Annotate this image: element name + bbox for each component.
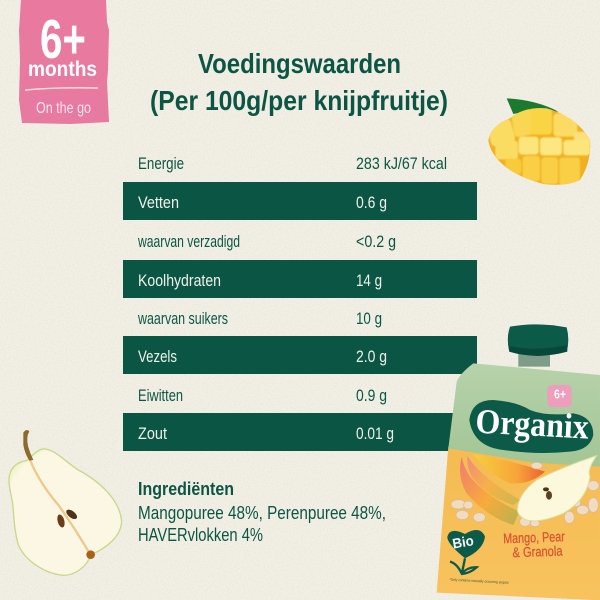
pouch badge: 6+ (547, 385, 572, 407)
ingredients: Mangopuree 48%, Perenpuree 48%, (138, 503, 386, 523)
row: Vezels (123, 336, 477, 374)
row: Eiwitten (138, 386, 387, 405)
badge: 6+ months on the go (19, 0, 109, 124)
ingredients: Ingrediënten (138, 479, 234, 499)
bio logo (447, 530, 485, 574)
pouch footnote: *Only contains naturally occurring sugars (449, 578, 509, 585)
icon: pear half (9, 430, 122, 575)
row: waarvan verzadigd: <0.2 g (356, 232, 396, 251)
row: Eiwitten: Eiwitten (138, 386, 183, 405)
logo: Organix: Organix (475, 402, 590, 447)
row: waarvan suikers (137, 309, 382, 328)
product name: Mango, Pear (503, 528, 565, 546)
product name (503, 528, 565, 560)
row: Eiwitten: 0.9 g (356, 386, 387, 405)
row: waarvan verzadigd (137, 232, 396, 251)
row: Vezels: 2.0 g (356, 347, 387, 366)
pouch pear (517, 456, 597, 521)
row: Vetten: 0.6 g (356, 193, 387, 212)
row: Koolhydraten: Koolhydraten (138, 271, 221, 290)
row: Energie: Energie (138, 154, 184, 173)
pouch body: yellow (437, 447, 600, 600)
row: Zout (123, 413, 477, 451)
ingredients: HAVERvlokken 4% (138, 525, 263, 545)
row: Zout: Zout (138, 424, 167, 443)
row: Zout: 0.01 g (356, 424, 394, 443)
pouch badge: 6+: 6+ (554, 387, 566, 401)
row: Vetten: Vetten (138, 193, 179, 212)
product pouch (437, 324, 600, 600)
title (150, 48, 448, 116)
row: Vezels: Vezels (138, 347, 177, 366)
row: Energie (138, 154, 447, 173)
title: Voedingswaarden (198, 48, 401, 79)
title: (Per 100g/per knijpfruitje) (150, 85, 448, 116)
bio logo: Bio (451, 532, 475, 552)
badge: 6+ months on the go: months (28, 58, 97, 81)
pouch body: green (448, 363, 600, 467)
ingredients (138, 479, 386, 545)
badge: 6+ months on the go: On the go (36, 100, 91, 117)
row: Koolhydraten (123, 260, 477, 298)
row: waarvan suikers: waarvan suikers (137, 309, 228, 328)
row: Energie: 283 kJ/67 kcal (356, 154, 447, 173)
pouch cap (508, 324, 568, 367)
row: Koolhydraten: 14 g (356, 271, 382, 290)
product name: & Granola (512, 543, 563, 560)
row: Vetten (123, 182, 477, 220)
mango slices (460, 454, 545, 525)
nutrition table (123, 154, 477, 451)
oats (451, 462, 599, 527)
icon: mango (486, 98, 591, 185)
row: waarvan suikers: 10 g (356, 309, 382, 328)
badge: 6+ months on the go: 6+ (40, 8, 86, 70)
row: waarvan verzadigd: waarvan verzadigd (137, 232, 240, 251)
